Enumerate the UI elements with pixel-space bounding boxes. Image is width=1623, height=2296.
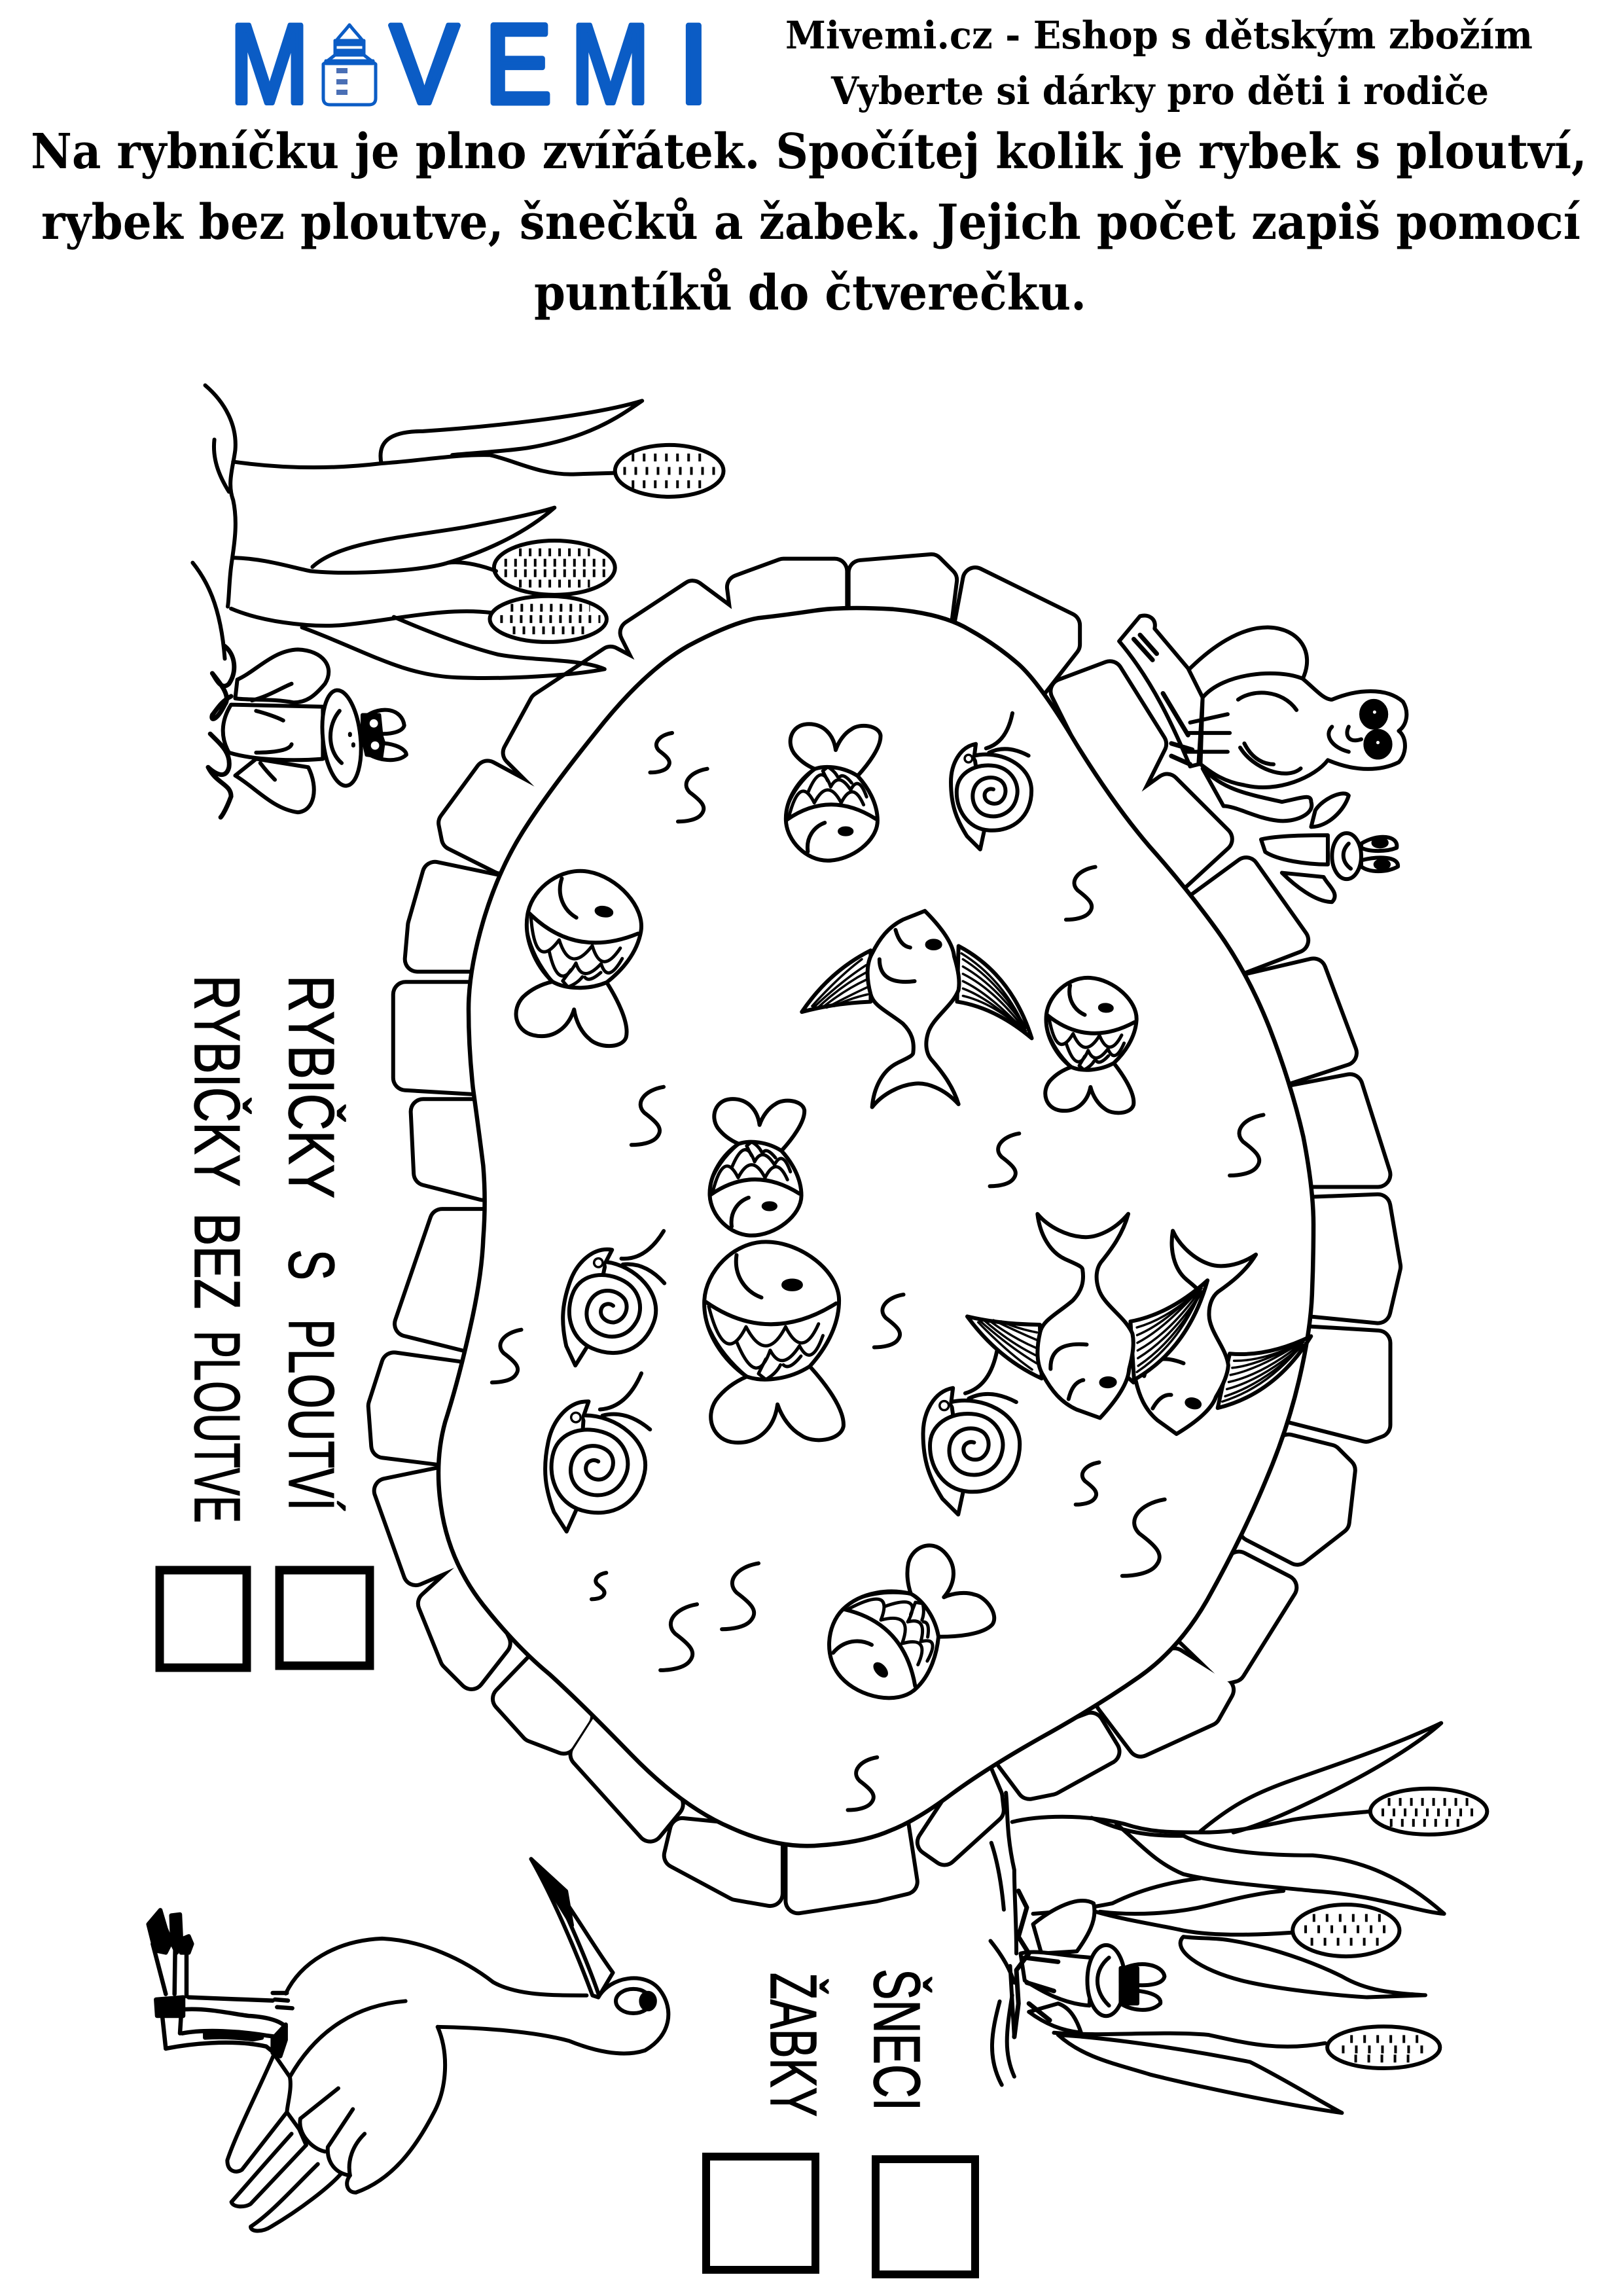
stork body and neck (286, 1939, 586, 1996)
label: fish without fins (181, 975, 253, 1523)
reeds: bottom right (991, 1723, 1487, 2113)
stork eye (616, 1989, 651, 2013)
fish with fins (802, 911, 1328, 1460)
logo: MIVEMI: E (485, 1, 552, 127)
title instructions: puntíků do čtverečku. (534, 265, 1086, 321)
pond water outline (438, 608, 1313, 1846)
shop tagline: Vyberte si dárky pro děti i rodiče (830, 69, 1489, 113)
label: frogs: ŽABKY (757, 1973, 830, 2117)
shop tagline (785, 13, 1533, 113)
title instructions (31, 124, 1587, 321)
label: fish with fins (276, 975, 348, 1511)
logo: MIVEMI: M (571, 1, 650, 127)
frog: left (208, 646, 406, 817)
reeds: top left (192, 386, 724, 678)
fish without fins (507, 724, 1142, 1723)
label: fish without fins: RYBIČKY (181, 975, 253, 1187)
snails (531, 713, 1031, 1545)
shop tagline: Mivemi.cz - Eshop s dětským zbožím (785, 13, 1533, 58)
stork legs and feet (149, 1910, 293, 2056)
frog: bottom right (1014, 1891, 1164, 2037)
logo: MIVEMI: I (678, 1, 709, 127)
label: fish with fins: S (276, 1249, 348, 1280)
label: fish without fins: BEZ (181, 1213, 253, 1309)
logo: MIVEMI (230, 1, 709, 127)
label: fish with fins: RYBIČKY (276, 975, 348, 1198)
label: fish without fins: PLOUTVE (181, 1331, 253, 1523)
answer box: fish without fins (160, 1570, 247, 1668)
icon: baby bottle (323, 25, 376, 105)
water ripples (492, 733, 1264, 1810)
label: snails: ŠNECI (860, 1969, 933, 2111)
stork beak (531, 1859, 613, 1998)
stork wing (347, 2027, 445, 2193)
answer box: snails (876, 2159, 975, 2274)
label: fish with fins: PLOUTVÍ (276, 1319, 348, 1511)
logo: MIVEMI: M (230, 1, 309, 127)
answer box: frogs (706, 2157, 815, 2270)
frog: small on the bank (1261, 793, 1398, 902)
frog: large on the bank (1119, 616, 1406, 821)
answer box: fish with fins (279, 1570, 370, 1666)
pond stone border (381, 567, 1388, 1901)
stork (227, 1859, 668, 2231)
logo: MIVEMI: V (390, 1, 459, 127)
